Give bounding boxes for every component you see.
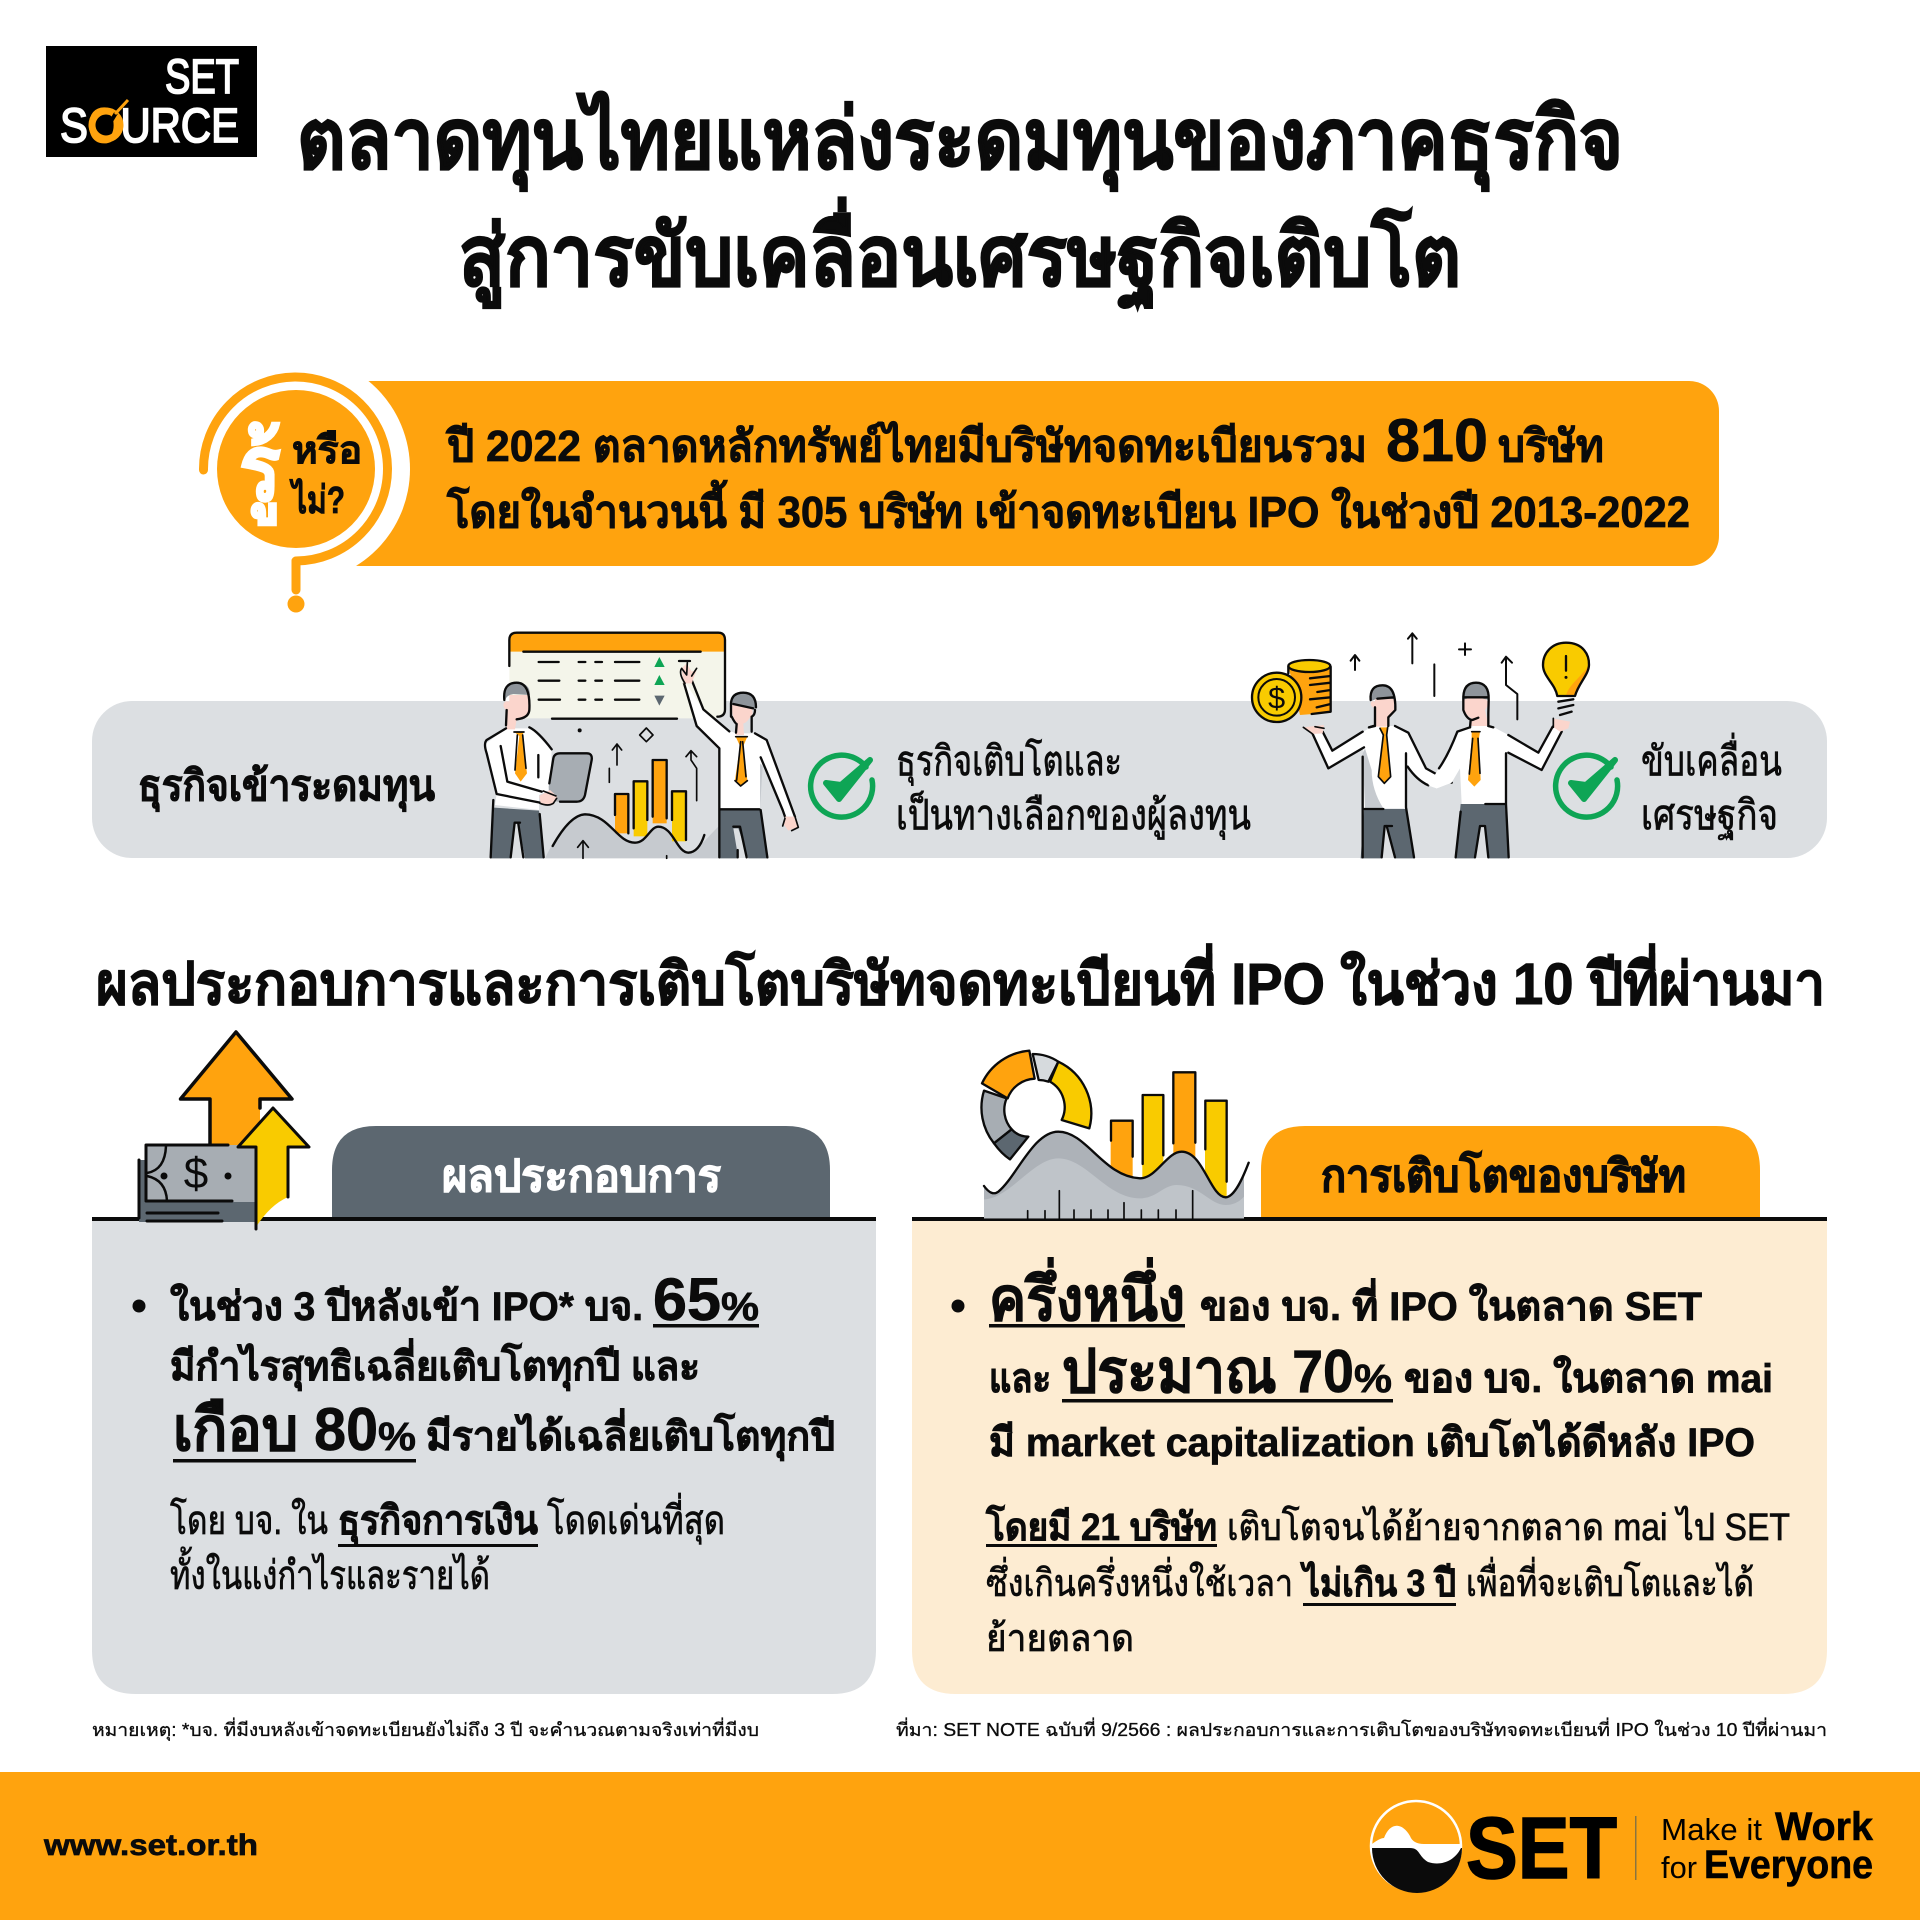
performance detail text (170, 1493, 725, 1598)
illustration: two businessmen with board and chart (485, 633, 798, 858)
title: สู่การขับเคลื่อนเศรษฐกิจเติบโต (459, 197, 1461, 311)
growth detail text: ย้ายตลาด (986, 1618, 1134, 1660)
tab: performance (332, 1126, 830, 1219)
slogan (1661, 1805, 1874, 1887)
icon: magnifier question badge (203, 377, 387, 612)
icon: magnifier question badge: ไม่? (289, 478, 345, 522)
callout text: โดยในจำนวนนี้ มี 305 บริษัท เข้าจดทะเบียน IPO ในช่วงปี 2013-2022 (446, 479, 1690, 537)
growth arrows (1351, 633, 1517, 719)
callout text: 810 (1386, 407, 1488, 474)
growth bullet text: % (1354, 1357, 1392, 1401)
logo: SET SOURCE: SET (165, 51, 239, 104)
performance detail text: ทั้งในแง่กำไรและรายได้ (170, 1546, 490, 1598)
growth detail text: โดยมี 21 บริษัท (985, 1504, 1217, 1549)
section heading: ผลประกอบการและการเติบโตบริษัทจดทะเบียนที่ IPO ในช่วง 10 ปีที่ผ่านมา (96, 943, 1825, 1017)
businessman with light bulb (1428, 683, 1570, 858)
panel: company growth (912, 1126, 1827, 1694)
businessman right (681, 663, 798, 858)
footnote: remark: หมายเหตุ: *บจ. ที่มีงบหลังเข้าจดทะเบียนยังไม่ถึง 3 ปี จะคำนวณตามจริงเท่าที่มีงบ (92, 1717, 759, 1741)
strip label: raising capital: ธุรกิจเข้าระดมทุน (138, 762, 435, 812)
strip text: business growth: เป็นทางเลือกของผู้ลงทุน (896, 791, 1251, 840)
tab: company growth: การเติบโตของบริษัท (1321, 1149, 1686, 1201)
growth bullet text: ครึ่งหนึ่ง (989, 1257, 1185, 1333)
icon: green check 1 (811, 755, 873, 817)
bars (1111, 1072, 1227, 1197)
icon: green check 2 (1556, 755, 1618, 817)
performance detail text: โดย บจ. ใน (170, 1497, 328, 1543)
growth detail text: เพื่อที่จะเติบโตและได้ (1466, 1557, 1754, 1605)
logo: SET SOURCE (46, 46, 257, 157)
growth bullet text: มี market capitalization เติบโตได้ดีหลัง IPO (989, 1419, 1755, 1465)
strip text: business growth (896, 738, 1251, 840)
coins (1252, 660, 1331, 722)
title: ตลาดทุนไทยแหล่งระดมทุนของภาคธุรกิจ (297, 91, 1623, 192)
growth bullet text (952, 1257, 1773, 1465)
icon: magnifier question badge: รู้ (239, 418, 281, 526)
footer band (0, 1772, 1920, 1920)
slogan: for (1661, 1850, 1697, 1885)
performance bullet text: มีรายได้เฉลี่ยเติบโตทุกปี (426, 1408, 835, 1462)
growth detail text: ไม่เกิน 3 ปี (1299, 1561, 1456, 1605)
performance bullet text (132, 1266, 835, 1463)
callout text: ปี 2022 ตลาดหลักทรัพย์ไทยมีบริษัทจดทะเบียนรวม (445, 420, 1367, 471)
logo: SET: SET (1466, 1800, 1617, 1897)
performance detail text: โดดเด่นที่สุด (547, 1493, 725, 1545)
footnote: source: ที่มา: SET NOTE ฉบับที่ 9/2566 : ผลประกอบการและการเติบโตของบริษัทจดทะเบียนที่ IPO ในช่วง 10 ปีที่ผ่านมา (896, 1717, 1827, 1740)
performance bullet text: 65 (653, 1266, 721, 1333)
panel: performance (92, 1126, 876, 1694)
tab: company growth (1261, 1126, 1760, 1219)
slogan: Everyone (1704, 1843, 1873, 1887)
callout banner (182, 355, 1719, 583)
tab: performance: ผลประกอบการ (442, 1152, 721, 1201)
growth bullet text: ของ บจ. ที่ IPO ในตลาด SET (1200, 1278, 1702, 1329)
website: www.set.or.th (43, 1829, 258, 1862)
icon: money with rising arrows: $ (184, 1149, 208, 1198)
slogan: Make it (1661, 1812, 1762, 1847)
growth detail text: ซึ่งเกินครึ่งหนึ่งใช้เวลา (986, 1557, 1293, 1605)
logo: SET (1371, 1800, 1617, 1897)
growth bullet text: ประมาณ 70 (1062, 1338, 1354, 1405)
strip text: driving the economy: เศรษฐกิจ (1641, 792, 1778, 840)
stock board (509, 633, 725, 719)
slogan: Work (1775, 1805, 1874, 1849)
performance detail text: ธุรกิจการเงิน (338, 1499, 538, 1546)
strip text: driving the economy: ขับเคลื่อน (1641, 733, 1782, 784)
logo: SET SOURCE: SOURCE (60, 100, 239, 153)
businessman with coins (1303, 685, 1452, 858)
callout text (445, 407, 1690, 537)
icon: magnifier question badge: หรือ (292, 430, 362, 472)
performance bullet text: % (721, 1285, 759, 1329)
wave area (984, 1132, 1249, 1218)
performance bullet text: มีกำไรสุทธิเฉลี่ยเติบโตทุกปี และ (170, 1338, 700, 1392)
icon: money with rising arrows (139, 1032, 309, 1229)
chart with bars (545, 728, 718, 858)
callout text: บริษัท (1498, 422, 1604, 471)
coins: $ (1268, 682, 1285, 716)
light bulb (1543, 643, 1589, 715)
growth detail text: เติบโตจนได้ย้ายจากตลาด mai ไป SET (1227, 1505, 1790, 1549)
strip text: business growth: ธุรกิจเติบโตและ (896, 738, 1122, 786)
performance bullet text: % (378, 1415, 416, 1459)
icon: donut and bar chart (981, 1051, 1249, 1218)
panel: capital raising strip (92, 701, 1827, 858)
growth bullet text: ของ บจ. ในตลาด mai (1404, 1355, 1773, 1401)
growth bullet text: และ (989, 1357, 1051, 1401)
donut chart (981, 1051, 1091, 1159)
illustration: two businessmen with coins and light bulb (1252, 633, 1589, 858)
businessman left (485, 683, 592, 858)
performance bullet text: เกือบ 80 (173, 1396, 378, 1463)
title (297, 91, 1623, 311)
performance bullet text: ในช่วง 3 ปีหลังเข้า IPO* บจ. (170, 1283, 643, 1329)
growth detail text (985, 1504, 1790, 1660)
strip text: driving the economy (1641, 733, 1782, 840)
